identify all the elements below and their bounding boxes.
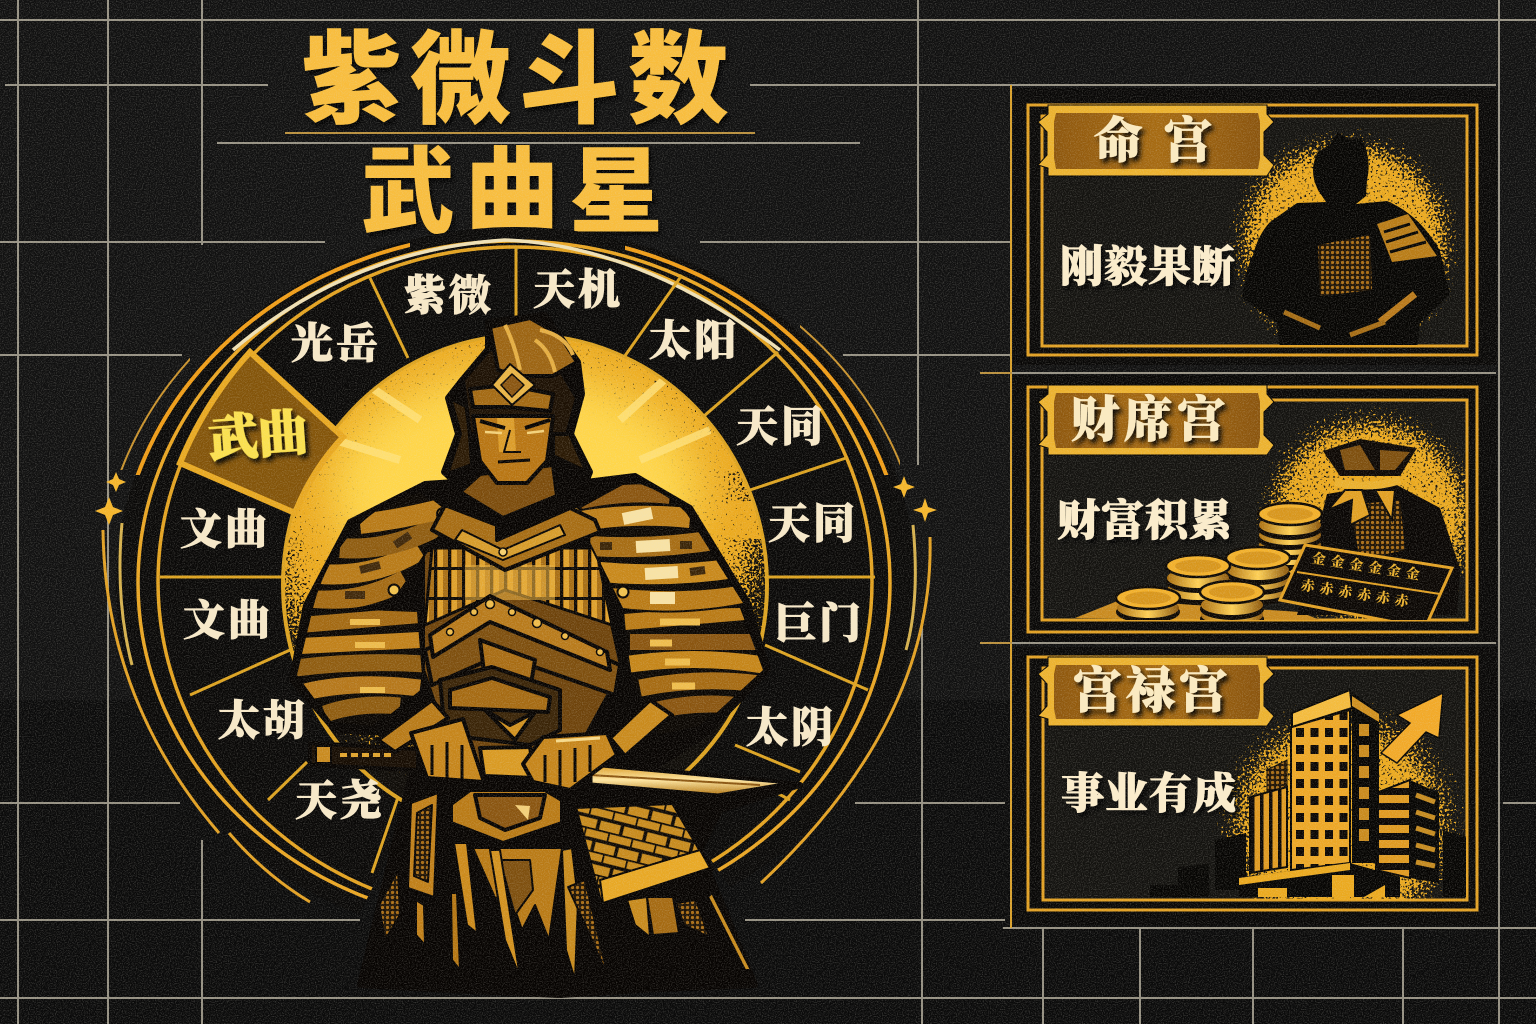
wheel labels: 光岳 [291, 321, 381, 368]
coin stacks [1116, 503, 1322, 630]
left pauldron & arm [297, 500, 442, 721]
wheel labels: 天同 [736, 405, 826, 451]
banner: 命 宫 [1094, 114, 1216, 168]
inner ring [283, 335, 767, 835]
banner: 宫禄宫 [1072, 664, 1232, 718]
banner [1038, 657, 1274, 726]
wheel labels: 天同 [768, 502, 858, 548]
title: main heading: 紫微斗数 [301, 25, 737, 137]
radiant burst [284, 340, 766, 776]
wheel labels: 太阴 [746, 705, 836, 752]
building and arrow [1150, 689, 1466, 900]
panel: 命宫 [1013, 88, 1497, 365]
title block [301, 25, 737, 244]
wheel labels: 文曲 [180, 508, 270, 554]
banner [1038, 385, 1274, 455]
sparkle stars [95, 472, 937, 525]
wheel labels: 太阳 [649, 318, 739, 365]
wheel labels: 天尧 [295, 778, 385, 825]
wheel labels: 巨门 [774, 601, 864, 648]
banknote: 金金金金金金 [1311, 550, 1426, 584]
banner [1038, 105, 1274, 176]
cell dividers [160, 247, 875, 873]
growth arrow [1381, 693, 1443, 763]
helmet and head [447, 318, 587, 483]
neck and collar [432, 465, 600, 570]
banner: 财席宫 [1070, 392, 1230, 448]
panel: 官禄宫 [1013, 647, 1497, 912]
skirt [379, 793, 751, 980]
hands and sword [310, 700, 790, 795]
black silhouette base [292, 315, 800, 995]
star wheel [95, 223, 937, 947]
glow and silhouette [1225, 125, 1465, 365]
warrior figure [292, 315, 800, 995]
money bag and coins [1075, 403, 1466, 620]
banknote [1280, 545, 1452, 628]
wheel labels: 紫微 [404, 273, 494, 320]
caption: 事业有成 [1061, 770, 1237, 818]
banknote: 赤赤赤赤赤赤 [1300, 577, 1415, 611]
wheel labels: 天机 [533, 267, 623, 314]
wheel labels [180, 267, 864, 825]
panel: 财帛宫 [1013, 375, 1497, 642]
wheel labels: 文曲 [183, 599, 273, 645]
highlighted cell: 武曲 [180, 352, 343, 513]
wheel labels: 太胡 [218, 698, 308, 745]
wheel dark disc [116, 227, 914, 700]
highlighted cell: 武曲: 武曲 [206, 405, 310, 467]
caption: 刚毅果断 [1060, 244, 1236, 292]
torso [423, 548, 622, 843]
outer rings [100, 223, 930, 947]
title: subheading: 武曲星 [361, 140, 673, 244]
caption: 财富积累 [1057, 496, 1233, 546]
right pauldron & arm [574, 484, 763, 716]
